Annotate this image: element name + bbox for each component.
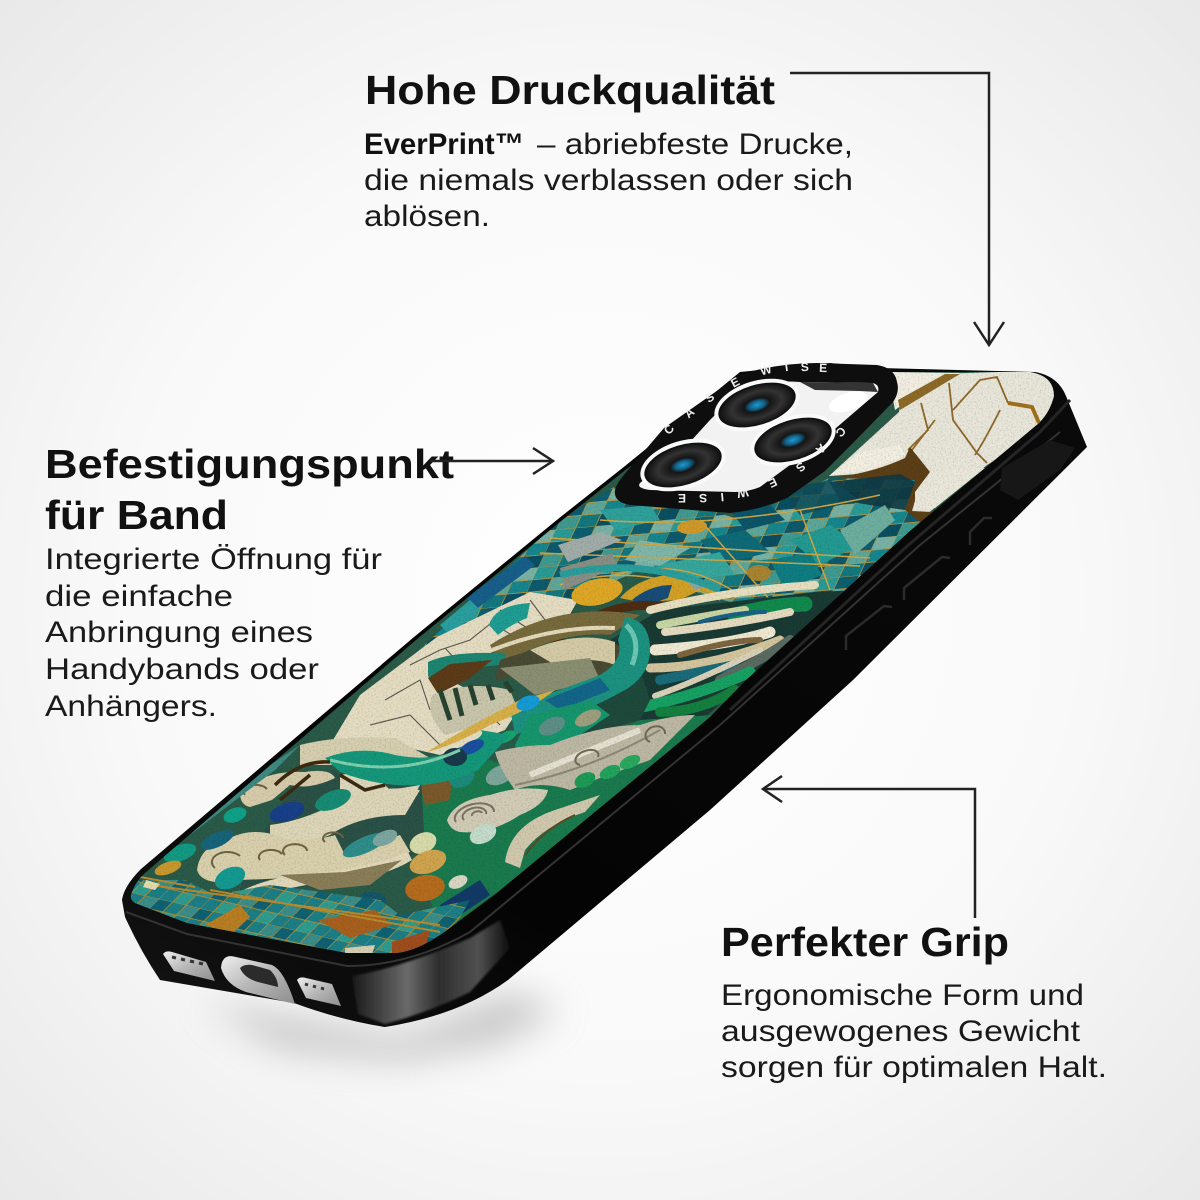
- brand text bottom: W: [735, 485, 749, 501]
- port: right speaker: [297, 977, 341, 1006]
- upper left glass beside clouds: [190, 745, 300, 835]
- brand text top: C: [661, 421, 677, 437]
- heading: Perfekter Grip: Perfekter Grip: [721, 919, 1009, 965]
- brand text bottom: C: [833, 424, 849, 440]
- arrow: print quality to case top: [790, 73, 1004, 345]
- dragon arm and claws: [275, 730, 510, 800]
- camera window: [639, 382, 878, 492]
- bezel highlight: [126, 432, 1060, 966]
- art base: [120, 360, 1070, 960]
- cloud shadow holes: [240, 760, 425, 890]
- text block: grip: [721, 979, 1107, 1084]
- heading: Befestigungspunkt für Band: Befestigungspunkt: [45, 441, 454, 487]
- heading: Befestigungspunkt für Band: für Band: [45, 492, 228, 538]
- heading: Hohe Druckqualität: Hohe Druckqualität: [365, 67, 775, 113]
- brand text bottom: E: [678, 491, 686, 505]
- printed artwork: [120, 360, 1070, 960]
- text block: lanyard attachment: Anbringung eines: [45, 616, 313, 649]
- text block: grip: sorgen für optimalen Halt.: [721, 1051, 1107, 1084]
- inner ring shadow: [800, 382, 878, 392]
- pearls and amber: [359, 824, 496, 914]
- clouds right: [447, 715, 695, 868]
- text block: lanyard attachment: [45, 543, 382, 723]
- shadow under phone: [200, 990, 560, 1062]
- brand text bottom: A: [813, 441, 829, 457]
- side switch: [1000, 440, 1075, 500]
- arrow: attachment point: [430, 448, 553, 474]
- stained glass panel: [416, 474, 920, 653]
- text block: print quality: EverPrint™: [364, 128, 524, 161]
- flash: [826, 387, 870, 417]
- cream cracked window: [330, 592, 578, 755]
- dragon: [427, 611, 650, 760]
- dragon upper hair: [490, 611, 640, 658]
- brand text top: A: [682, 405, 698, 421]
- brand text bottom: [678, 424, 849, 505]
- cracked lines: [370, 600, 545, 745]
- camera island: [615, 360, 898, 513]
- gold brown patch: [421, 780, 452, 805]
- dark stream background: [610, 590, 860, 722]
- brand text top: E: [728, 374, 742, 391]
- case corner sheen: [352, 920, 510, 1024]
- lower mid dark area: [582, 676, 650, 734]
- brand text top: I: [784, 360, 789, 374]
- side buttons: [846, 518, 992, 650]
- text block: lanyard attachment: Anhängers.: [45, 690, 217, 723]
- bottom stained glass band: [128, 877, 470, 960]
- gold spine: [427, 690, 555, 752]
- clouds left: [154, 737, 429, 890]
- lens 2: [744, 404, 842, 476]
- dragon beard: [430, 686, 520, 735]
- blue gem: [516, 695, 540, 711]
- lens 3: [634, 429, 732, 501]
- text block: lanyard attachment: Integrierte Öffnung für: [45, 543, 382, 576]
- heading: Befestigungspunkt für Band: [45, 441, 454, 538]
- brand text bottom: S: [699, 491, 707, 505]
- text block: print quality: die niemals verblassen oder sich: [364, 164, 853, 197]
- arrow: grip: [763, 776, 975, 918]
- brand text bottom: I: [720, 490, 725, 504]
- teal glass blob: [489, 603, 530, 635]
- lower green field: [415, 715, 712, 935]
- text block: grip: Ergonomische Form und: [721, 979, 1084, 1012]
- text block: lanyard attachment: die einfache: [45, 580, 233, 613]
- brand text top: S: [702, 390, 717, 406]
- text block: print quality: [364, 128, 853, 233]
- marble panel: [829, 370, 1060, 533]
- lens 1: [708, 369, 806, 441]
- brand text top: E: [819, 361, 827, 375]
- dragon jaw and mouth: [428, 652, 506, 678]
- scale cluster: [515, 700, 610, 748]
- dragon body coil: [510, 617, 650, 735]
- text block: print quality: – abriebfeste Drucke,: [537, 128, 853, 161]
- case body: [122, 363, 1087, 1027]
- camera ring: [615, 363, 898, 513]
- speckle texture: [120, 360, 1070, 960]
- brand text bottom: S: [793, 459, 808, 475]
- bezel inner edge: [730, 400, 1070, 710]
- cloud oval gems: [270, 802, 304, 822]
- text block: print quality: ablösen.: [364, 200, 490, 233]
- golden moon: [560, 568, 722, 610]
- port: left speaker: [163, 951, 215, 981]
- brand text top: W: [759, 362, 774, 378]
- phone case: [120, 360, 1087, 1027]
- brand text top: S: [800, 360, 809, 374]
- port: USB-C: [221, 956, 295, 1004]
- flowing whiskers and mane: [555, 585, 815, 712]
- brand text bottom: E: [766, 475, 779, 491]
- text block: lanyard attachment: Handybands oder: [45, 653, 319, 686]
- brand text top: [661, 360, 827, 437]
- text block: grip: ausgewogenes Gewicht: [721, 1015, 1081, 1048]
